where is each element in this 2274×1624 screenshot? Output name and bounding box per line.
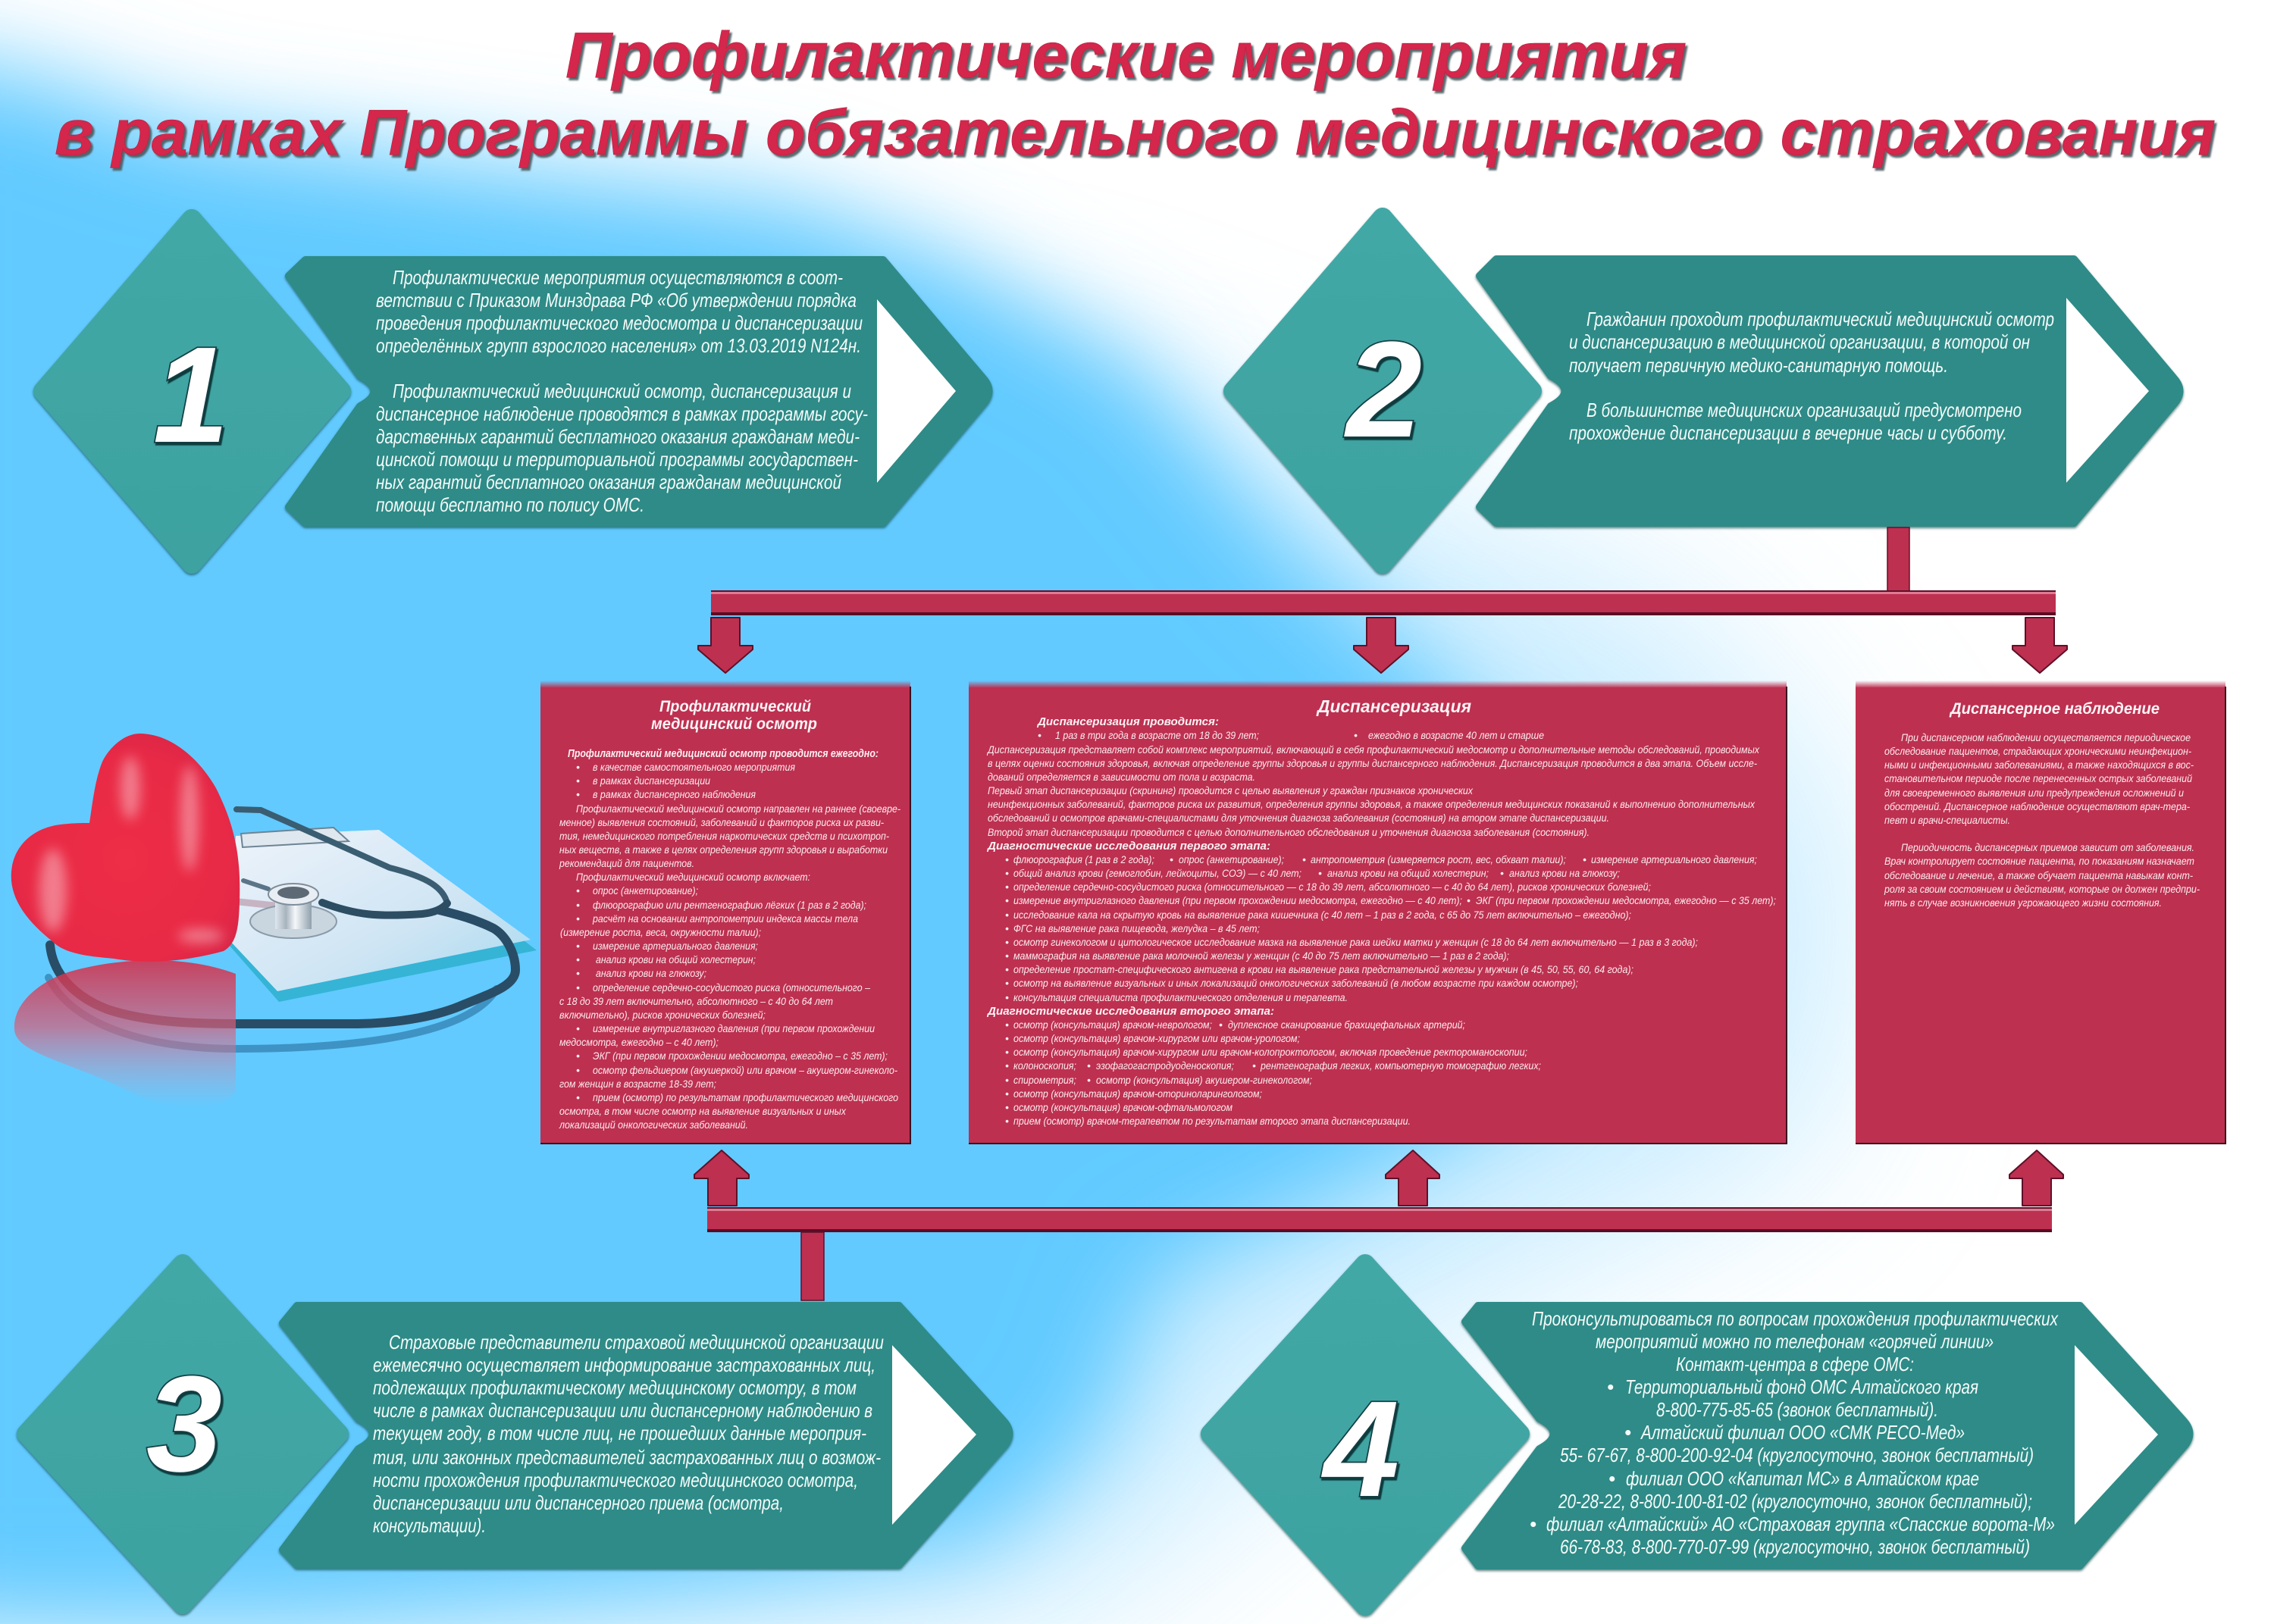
body text: измерение внутриглазного давления (при первом прохождении xyxy=(593,1022,875,1034)
body text: осмотр гинекологом и цитологическое исследование мазка на выявление рака шейки матки у женщин (с 18 до 64 лет включительно — 1 раз в 3 года); xyxy=(1013,936,1698,948)
body text: анализ крови на глюкозу; xyxy=(1509,867,1620,879)
text 1: ных гарантий бесплатного оказания гражданам медицинской xyxy=(376,471,841,493)
text 4: филиал ООО «Капитал МС» в Алтайском крае xyxy=(1626,1467,1979,1490)
text 4: • xyxy=(1624,1421,1631,1444)
heading: Диспансеризация xyxy=(1316,696,1471,716)
body text: Первый этап диспансеризации (скрининг) проводится с целью выявления у граждан признаков хронических xyxy=(988,784,1474,796)
body text: ЭКГ (при первом прохождении медосмотра, ежегодно — с 35 лет); xyxy=(1476,894,1776,906)
body text: • xyxy=(576,788,580,800)
white triangle 1 xyxy=(877,299,956,483)
body text: Профилактический медицинский осмотр включает: xyxy=(576,871,810,883)
body text: осмотр (консультация) врачом-оториноларингологом; xyxy=(1013,1087,1262,1100)
body text: • xyxy=(576,1022,580,1034)
up arrow right xyxy=(2009,1150,2063,1206)
body text: включительно), рисков хронических болезней; xyxy=(559,1009,766,1021)
heading: Профилактический xyxy=(659,698,811,715)
body text: осмотра, в том числе осмотр на выявление визуальных и иных xyxy=(559,1105,847,1117)
heart highlights xyxy=(39,756,224,943)
panel: step 4 xyxy=(1211,1264,2189,1606)
body text: прием (осмотр) врачом-терапевтом по результатам второго этапа диспансеризации. xyxy=(1013,1115,1411,1127)
body text: измерение внутриглазного давления (при первом прохождении медосмотра, ежегодно — с 40 лет); xyxy=(1013,894,1462,906)
heart reflection xyxy=(14,960,236,1108)
panel: dispensary observation xyxy=(1856,681,2225,1144)
body text: • xyxy=(1005,991,1009,1003)
text 1: определённых групп взрослого населения» от 13.03.2019 N124н. xyxy=(376,334,861,357)
body text: • xyxy=(1005,881,1009,893)
text 3 xyxy=(373,1331,884,1537)
body text: • xyxy=(1005,1019,1009,1031)
body text: нять в случае возникновения угрожающего жизни состояния. xyxy=(1884,896,2162,909)
body text: Второй этап диспансеризации проводится с целью дополнительного обследования и уточнения диагноза заболевания (состояния). xyxy=(988,826,1590,838)
body text: осмотр (консультация) врачом-хирургом или врачом-урологом; xyxy=(1013,1032,1300,1044)
diamond 1 xyxy=(43,219,341,564)
up arrow middle xyxy=(1386,1150,1439,1206)
body text: • xyxy=(576,761,580,773)
body text: осмотр на выявление визуальных и иных локализаций онкологических заболеваний (в любом возрасте при каждом осмотре); xyxy=(1013,977,1578,989)
text 4: мероприятий можно по телефонам «горячей линии» xyxy=(1596,1330,1994,1353)
text 3: Страховые представители страховой медицинской организации xyxy=(389,1331,884,1353)
body text: • xyxy=(1005,909,1009,921)
text 1: цинской помощи и территориальной программы государствен- xyxy=(376,448,858,471)
text 3: подлежащих профилактическому медицинскому осмотру, в том xyxy=(373,1376,857,1399)
text 4: Территориальный фонд ОМС Алтайского края xyxy=(1625,1375,1978,1398)
body text: роля за своим состоянием и действиям, которые он должен предпри- xyxy=(1884,883,2200,895)
body text: • xyxy=(1005,1059,1009,1072)
down arrow middle xyxy=(1354,618,1408,673)
body text: • xyxy=(1005,1115,1009,1127)
text 1: проведения профилактического медосмотра и диспансеризации xyxy=(376,311,863,334)
panel: dispanserization xyxy=(969,681,1787,1144)
body text: • xyxy=(1087,1074,1091,1086)
text 1: Профилактический медицинский осмотр, диспансеризация и xyxy=(393,380,851,402)
body text: • xyxy=(1005,867,1009,879)
body text: опрос (анкетирование); xyxy=(593,884,698,896)
body text: • xyxy=(1005,1101,1009,1113)
panel: step 3 xyxy=(27,1264,1010,1604)
body text: эзофагогастродуоденоскопия; xyxy=(1096,1059,1234,1072)
arrow block 1 xyxy=(289,260,988,523)
title: в рамках Программы обязательного медицинского страхования xyxy=(55,97,2216,169)
text 3: диспансеризации или диспансерного приема (осмотра, xyxy=(373,1491,784,1514)
heart xyxy=(11,734,240,962)
body text: • xyxy=(1583,853,1586,865)
body text: измерение артериального давления; xyxy=(1591,853,1757,865)
body text: менное) выявления состояний, заболеваний и факторов риска их разви- xyxy=(559,816,884,828)
text 2: прохождение диспансеризации в вечерние часы и субботу. xyxy=(1569,421,2007,444)
text 4: филиал «Алтайский» АО «Страховая группа «Спасские ворота-М» xyxy=(1546,1513,2055,1535)
text 4: 66-78-83, 8-800-770-07-99 (круглосуточно, звонок бесплатный) xyxy=(1560,1535,2030,1558)
body text: • xyxy=(1005,963,1009,975)
body text: • xyxy=(1087,1059,1091,1072)
body text: Диспансеризация представляет собой комплекс мероприятий, включающий в себя профилактический медосмотр и дополнительные методы обследований, проводимых xyxy=(986,743,1760,756)
body text: • xyxy=(1005,1046,1009,1058)
body text: определение сердечно-сосудистого риска (относительного — с 18 до 39 лет, абсолютного — с 40 до 64 лет), рисков хронических болезней; xyxy=(1013,881,1651,893)
body text: исследование кала на скрытую кровь на выявление рака кишечника (с 40 лет – 1 раз в 2 года, с 65 до 75 лет включительно – ежегодно); xyxy=(1013,909,1631,921)
body text: в качестве самостоятельного мероприятия xyxy=(593,761,795,773)
body text: анализ крови на глюкозу; xyxy=(596,967,706,979)
body text: дований определяется в зависимости от пола и возраста. xyxy=(988,771,1255,783)
diamond 4 xyxy=(1211,1264,1520,1606)
text 2: получает первичную медико-санитарную помощь. xyxy=(1569,354,1948,377)
body text xyxy=(986,716,1776,1127)
body text: осмотр (консультация) врачом-неврологом; xyxy=(1013,1019,1212,1031)
text 3: ности прохождения профилактического медицинского осмотра, xyxy=(373,1469,858,1491)
body text: определение сердечно-сосудистого риска (относительного – xyxy=(593,981,870,993)
body text: в рамках диспансеризации xyxy=(593,774,710,787)
body text: • xyxy=(576,967,580,979)
white triangle 3 xyxy=(892,1345,976,1525)
body text: анализ крови на общий холестерин; xyxy=(596,953,756,965)
diamond 2 xyxy=(1233,217,1532,564)
text 2: Гражданин проходит профилактический медицинский осмотр xyxy=(1586,308,2054,330)
body text: • xyxy=(1170,853,1173,865)
body text: • xyxy=(576,1091,580,1103)
white triangle 2 xyxy=(2066,298,2149,483)
body text: • xyxy=(1005,853,1009,865)
body text: • xyxy=(1038,729,1041,741)
body text: становительном периоде после перенесенных острых заболеваний xyxy=(1884,772,2192,784)
body text: для своевременного выявления или предупреждения осложнений и xyxy=(1884,787,2184,799)
body text: медосмотра, ежегодно – с 40 лет); xyxy=(559,1036,719,1048)
number 2: 2 xyxy=(1344,314,1422,466)
body text: При диспансерном наблюдении осуществляется периодическое xyxy=(1901,731,2191,743)
body text: • xyxy=(576,899,580,911)
text 4: • xyxy=(1607,1375,1614,1398)
body text: опрос (анкетирование); xyxy=(1179,853,1284,865)
body text: ФГС на выявление рака пищевода, желудка – в 45 лет; xyxy=(1013,922,1260,934)
body text: осмотр (консультация) врачом-хирургом или врачом-колопроктологом, включая проведение ректороманоскопии; xyxy=(1013,1046,1527,1058)
text 1: Профилактические мероприятия осуществляются в соот- xyxy=(393,266,843,289)
body text: • xyxy=(576,981,580,993)
body text: • xyxy=(1302,853,1306,865)
heading: медицинский осмотр xyxy=(651,715,817,733)
panel: step 1 xyxy=(43,219,988,564)
clipboard xyxy=(229,828,537,1002)
stethoscope chest piece xyxy=(250,884,337,938)
body text: Врач контролирует состояние пациента, по показаниям назначает xyxy=(1884,855,2194,867)
panel: step 2 xyxy=(1233,217,2180,564)
arrow block 2 xyxy=(1480,259,2180,523)
body text: неинфекционных заболеваний, факторов риска их развития, определения группы здоровья, а также определения медицинских показаний к выполнению дополнительных xyxy=(988,798,1756,810)
body text: обследование и лечение, а также обучает пациента навыкам конт- xyxy=(1884,869,2193,881)
body text: • xyxy=(1005,922,1009,934)
body text: в рамках диспансерного наблюдения xyxy=(593,788,756,800)
text 4: • xyxy=(1608,1467,1615,1490)
arrow block 4 xyxy=(1465,1306,2189,1566)
body text: • xyxy=(1005,1087,1009,1100)
body text: локализаций онкологических заболеваний. xyxy=(559,1119,748,1131)
body text: ными и инфекционными заболеваниями, а также находящихся в вос- xyxy=(1884,759,2194,771)
body text: дуплексное сканирование брахицефальных артерий; xyxy=(1228,1019,1465,1031)
body text xyxy=(559,748,901,1131)
number 3: 3 xyxy=(146,1348,222,1500)
arrow block 3 xyxy=(283,1306,1010,1565)
body text: 1 раз в три года в возрасте от 18 до 39 лет; xyxy=(1055,729,1259,741)
body text: • xyxy=(1354,729,1358,741)
body text: • xyxy=(576,1050,580,1062)
heading: Диспансерное наблюдение xyxy=(1949,700,2160,718)
body text: обследование пациентов, страдающих хроническими неинфекцион- xyxy=(1884,745,2191,757)
body text: гом женщин в возрасте 18-39 лет; xyxy=(559,1078,716,1090)
diamond 3 xyxy=(27,1264,339,1604)
body text: (измерение роста, веса, окружности талии); xyxy=(560,926,761,938)
text 4: 20-28-22, 8-800-100-81-02 (круглосуточно, звонок бесплатный); xyxy=(1558,1490,2032,1513)
text 3: текущем году, в том числе лиц, не прошедших данные мероприя- xyxy=(373,1422,866,1444)
text 4: • xyxy=(1530,1513,1536,1535)
body text: флюорография (1 раз в 2 года); xyxy=(1013,853,1154,865)
body text: анализ крови на общий холестерин; xyxy=(1327,867,1489,879)
panel: preventive medical examination xyxy=(540,681,910,1144)
body text: Периодичность диспансерных приемов зависит от заболевания. xyxy=(1901,841,2194,853)
body text: измерение артериального давления; xyxy=(593,940,758,952)
body text: • xyxy=(576,940,580,952)
text 4: 8-800-775-85-65 (звонок бесплатный). xyxy=(1656,1398,1938,1421)
text 4 xyxy=(1530,1307,2059,1558)
body text: Диагностические исследования второго этапа: xyxy=(986,1006,1274,1018)
body text: Профилактический медицинский осмотр направлен на раннее (своевре- xyxy=(576,803,901,815)
body text: • xyxy=(1252,1059,1256,1072)
text 3: ежемесячно осуществляет информирование застрахованных лиц, xyxy=(373,1353,875,1376)
body text: обострений. Диспансерное наблюдение осуществляют врач-тера- xyxy=(1884,800,2190,812)
title xyxy=(55,20,2216,169)
stethoscope tube xyxy=(49,809,515,1049)
body text: колоноскопия; xyxy=(1013,1059,1076,1072)
title: Профилактические мероприятия xyxy=(565,20,1687,92)
text 2 xyxy=(1569,308,2054,444)
body text: прием (осмотр) по результатам профилактического медицинского xyxy=(593,1091,898,1103)
body text: спирометрия; xyxy=(1013,1074,1076,1086)
body text: • xyxy=(1005,977,1009,989)
text 3: консультации). xyxy=(373,1514,486,1537)
bottom horizontal bar xyxy=(707,1207,2052,1232)
top horizontal bar xyxy=(711,590,2056,615)
heading xyxy=(651,698,817,733)
text 1: диспансерное наблюдение проводятся в рамках программы госу- xyxy=(376,402,868,425)
body text: • xyxy=(1005,936,1009,948)
body text: консультация специалиста профилактического отделения и терапевта. xyxy=(1013,991,1348,1003)
body text: антропометрия (измеряется рост, вес, обхват талии); xyxy=(1311,853,1566,865)
body text: маммография на выявление рака молочной железы у женщин (с 40 до 75 лет включительно — 1 раз в 2 года); xyxy=(1013,950,1509,962)
body text: осмотр (консультация) врачом-офтальмологом xyxy=(1013,1101,1233,1113)
body text: Профилактический медицинский осмотр проводится ежегодно: xyxy=(568,748,879,760)
body text: • xyxy=(1219,1019,1223,1031)
up arrow left xyxy=(694,1150,749,1206)
body text: Диагностические исследования первого этапа: xyxy=(986,840,1270,853)
body text: • xyxy=(1005,1032,1009,1044)
body text: • xyxy=(1005,1074,1009,1086)
body text: общий анализ крови (гемоглобин, лейкоциты, СОЭ) — с 40 лет; xyxy=(1013,867,1301,879)
body text: расчёт на основании антропометрии индекса массы тела xyxy=(592,912,858,925)
body text: флюорографию или рентгенографию лёгких (1 раз в 2 года); xyxy=(593,899,866,911)
number 1: 1 xyxy=(153,319,229,471)
body text: • xyxy=(576,774,580,787)
body text: • xyxy=(576,884,580,896)
text 2: В большинстве медицинских организаций предусмотрено xyxy=(1586,399,2022,421)
text 4: Контакт-центра в сфере ОМС: xyxy=(1676,1353,1914,1375)
connector from step 2 xyxy=(1887,527,1909,591)
text 3: тия, или законных представителей застрахованных лиц о возмож- xyxy=(373,1446,881,1469)
body text: с 18 до 39 лет включительно, абсолютного – с 40 до 64 лет xyxy=(559,995,833,1007)
illustration: heart and stethoscope xyxy=(11,734,537,1108)
body text: Диспансеризация проводится: xyxy=(1036,716,1219,728)
text 1 xyxy=(376,266,868,516)
body text: рекомендаций для пациентов. xyxy=(559,857,694,869)
number 4: 4 xyxy=(1321,1373,1399,1525)
body text: ных веществ, а также в целях определения групп здоровья и выработки xyxy=(559,843,888,856)
body text: • xyxy=(1318,867,1322,879)
down arrow right xyxy=(2012,618,2067,673)
body text: тия, немедицинского потребления наркотических средств и психотроп- xyxy=(559,830,889,842)
body text xyxy=(1884,731,2200,909)
text 4: Проконсультироваться по вопросам прохождения профилактических xyxy=(1532,1307,2059,1330)
body text: рентгенография легких, компьютерную томографию легких; xyxy=(1260,1059,1541,1072)
body text: осмотр (консультация) акушером-гинекологом; xyxy=(1096,1074,1312,1086)
body text: в целях оценки состояния здоровья, включая определение группы здоровья и группы диспансерного наблюдения. Диспансеризация проводится в два этапа. Объем иссле- xyxy=(988,757,1757,769)
body text: • xyxy=(1500,867,1504,879)
text 1: помощи бесплатно по полису ОМС. xyxy=(376,493,644,516)
body text: определение простат-специфического антигена в крови на выявление рака предстательной железы у мужчин (в 45, 50, 55, 60, 64 года); xyxy=(1013,963,1633,975)
body text: • xyxy=(576,1064,580,1076)
text 3: числе в рамках диспансеризации или диспансерному наблюдению в xyxy=(373,1399,872,1422)
text 1: дарственных гарантий бесплатного оказания гражданам меди- xyxy=(376,425,860,448)
body text: ежегодно в возрасте 40 лет и старше xyxy=(1368,729,1544,741)
text 4: Алтайский филиал ООО «СМК РЕСО-Мед» xyxy=(1640,1421,1965,1444)
text 1: ветствии с Приказом Минздрава РФ «Об утверждении порядка xyxy=(376,289,857,311)
text 2: и диспансеризацию в медицинской организации, в которой он xyxy=(1569,330,2030,353)
body text: ЭКГ (при первом прохождении медосмотра, ежегодно – с 35 лет); xyxy=(593,1050,888,1062)
connector to step 3 xyxy=(801,1232,824,1300)
body text: певт и врачи-специалисты. xyxy=(1884,814,2010,826)
white triangle 4 xyxy=(2075,1345,2158,1525)
body text: • xyxy=(576,912,580,925)
body text: • xyxy=(1467,894,1471,906)
body text: обследований и осмотров врачами-специалистами для уточнения диагноза заболевания (состояния) на втором этапе диспансеризации. xyxy=(988,812,1609,824)
body text: • xyxy=(1005,894,1009,906)
body text: осмотр фельдшером (акушеркой) или врачом – акушером-гинеколо- xyxy=(593,1064,897,1076)
text 4: 55- 67-67, 8-800-200-92-04 (круглосуточно, звонок бесплатный) xyxy=(1560,1444,2034,1466)
body text: • xyxy=(576,953,580,965)
body text: • xyxy=(1005,950,1009,962)
down arrow left xyxy=(698,618,753,673)
